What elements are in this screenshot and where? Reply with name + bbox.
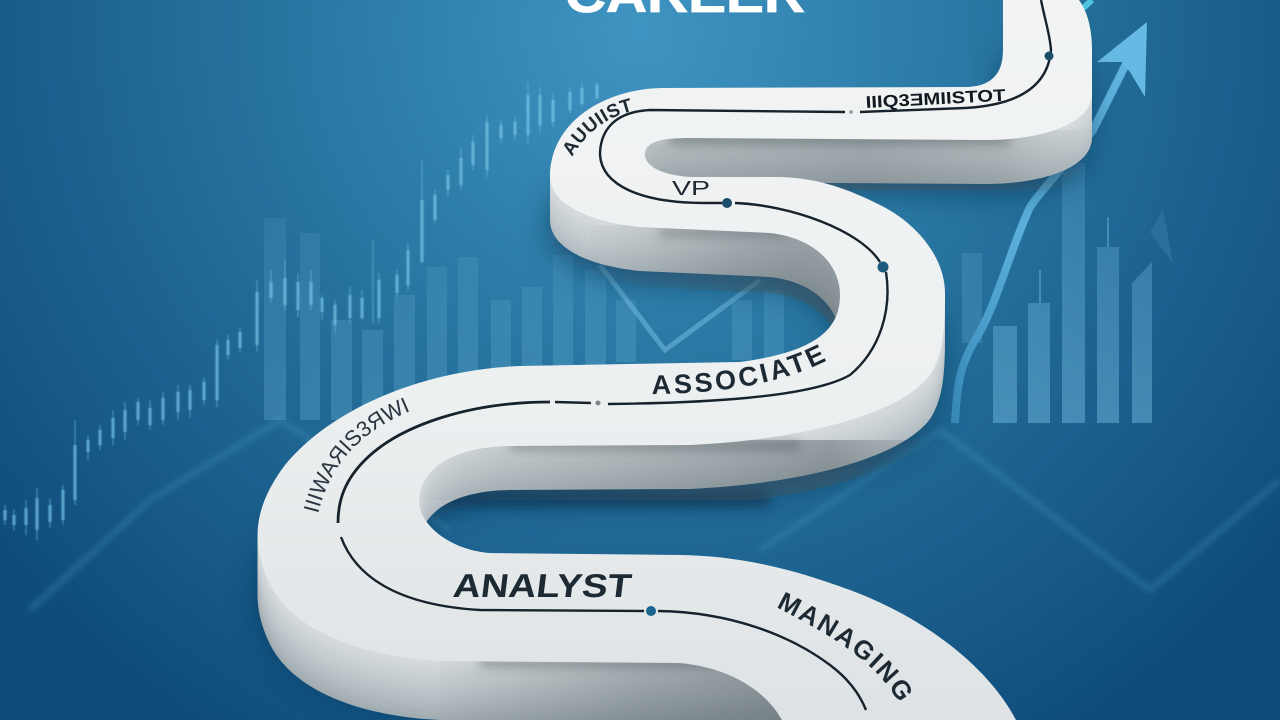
road side faces: [258, 4, 1092, 720]
road centre line: [338, 0, 1051, 710]
chart: background bars right: [962, 163, 1173, 423]
chart: faint trend lines: [30, 420, 1280, 610]
label: analyst: ANALYST: [451, 568, 634, 605]
hole shadow: [440, 490, 770, 508]
label: left curved: IIIWAЯIS3ЯWI: [304, 398, 409, 512]
chart: background bars left: [264, 218, 784, 420]
inner wall shading: [415, 130, 1090, 720]
label: upper managing: IIIQ3ƎMIISTOT: [865, 86, 1007, 112]
chart: candlesticks rising: [5, 82, 597, 540]
road top surface: [258, 0, 1092, 720]
label: upper analyst: AUUIIST: [564, 98, 630, 156]
label: associate: ASSOCIATE: [652, 344, 826, 394]
road shadow: [256, 55, 1090, 715]
label: vp: VP: [672, 178, 710, 200]
winding road: [258, 0, 1092, 720]
milestone dots: [596, 52, 1054, 616]
arrow: rising trend: [955, 0, 1147, 423]
label: managing: MANAGING: [778, 592, 911, 700]
chart: middle zigzag: [600, 265, 760, 350]
